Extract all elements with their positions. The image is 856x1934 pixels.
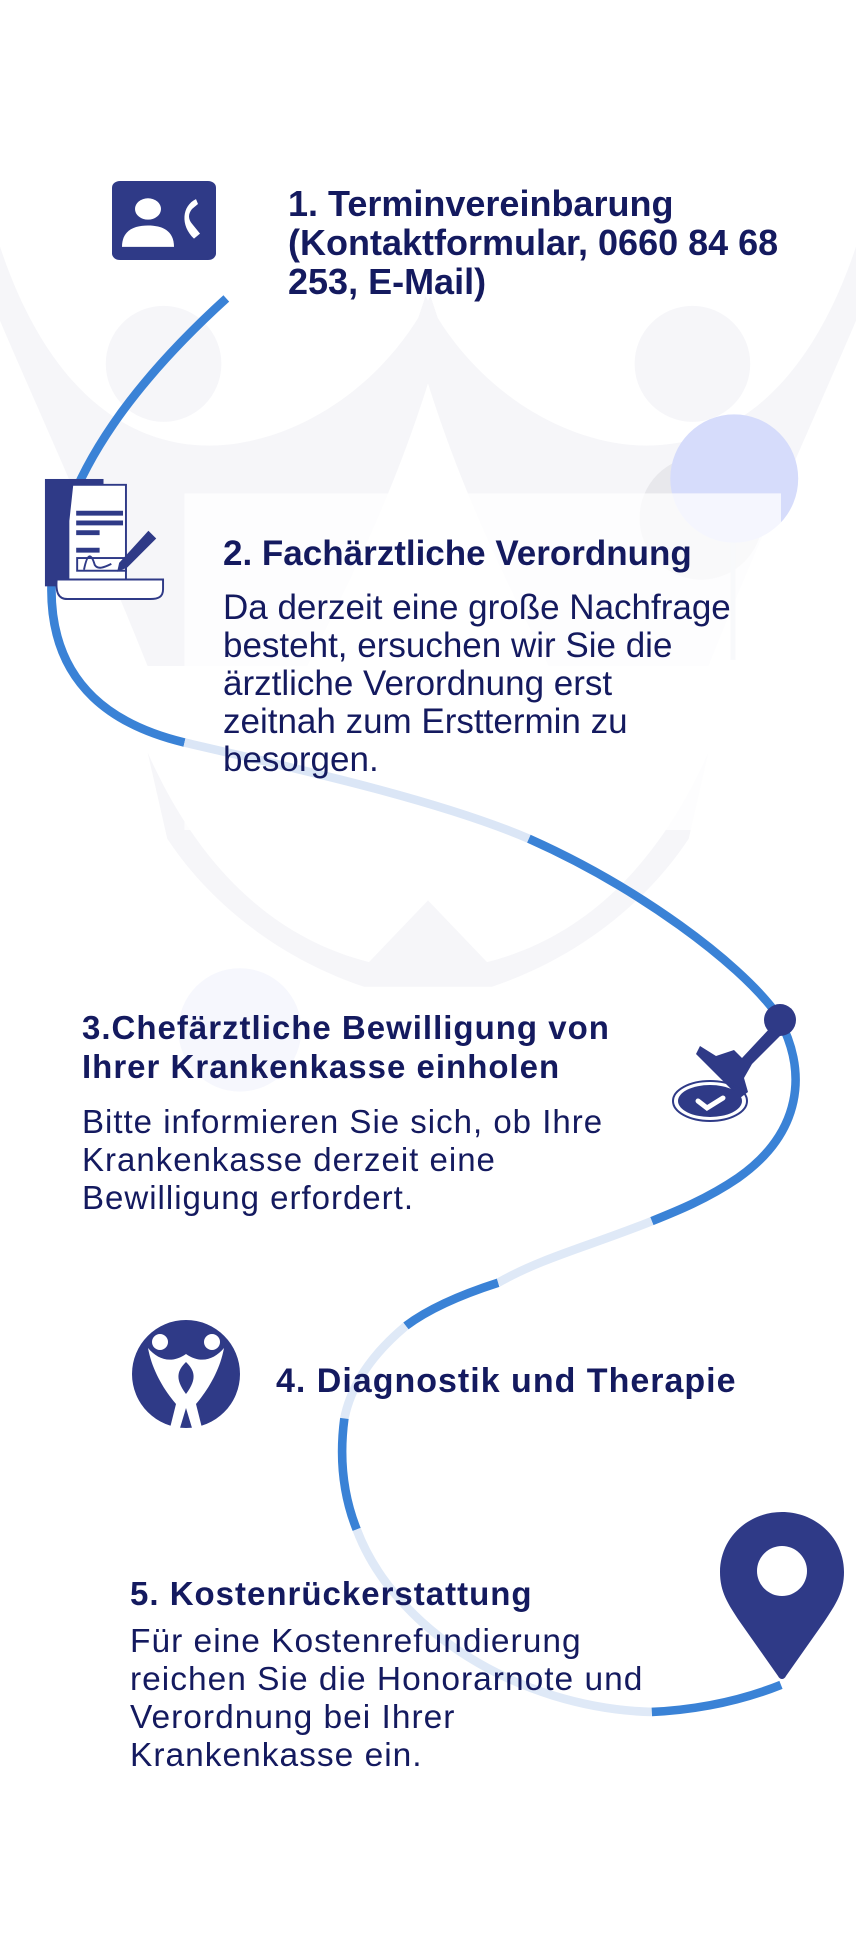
watermark logo xyxy=(0,247,856,987)
icon: logo circle xyxy=(132,1320,240,1428)
heading 1: 1. Terminvereinbarung xyxy=(288,183,673,224)
text 2 xyxy=(223,588,731,779)
icon: contact card xyxy=(112,181,216,260)
heading 1: 253, E-Mail) xyxy=(288,261,486,302)
text 5: Für eine Kostenrefundierung xyxy=(130,1623,582,1660)
route path xyxy=(51,298,796,1712)
icon: stamp xyxy=(672,1004,796,1122)
text 2: besteht, ersuchen wir Sie die xyxy=(223,626,672,665)
white panel xyxy=(184,493,781,830)
text 5: Verordnung bei Ihrer xyxy=(130,1699,455,1736)
text 2: Da derzeit eine große Nachfrage xyxy=(223,588,731,627)
text 3 xyxy=(82,1103,603,1216)
text 5: reichen Sie die Honorarnote und xyxy=(130,1661,643,1698)
icon: location pin xyxy=(720,1512,844,1679)
text 2: besorgen. xyxy=(223,740,379,779)
heading 1 xyxy=(288,183,778,302)
text 3: Bewilligung erfordert. xyxy=(82,1179,414,1216)
text 5 xyxy=(130,1623,643,1774)
heading 5: 5. Kostenrückerstattung xyxy=(130,1575,533,1612)
heading 1: (Kontaktformular, 0660 84 68 xyxy=(288,222,778,263)
text 2: ärztliche Verordnung erst xyxy=(223,664,612,703)
heading 2: 2. Fachärztliche Verordnung xyxy=(223,534,692,573)
decorative circles xyxy=(178,414,798,1092)
text 3: Bitte informieren Sie sich, ob Ihre xyxy=(82,1103,603,1140)
text 3: Krankenkasse derzeit eine xyxy=(82,1141,496,1178)
heading 3 xyxy=(82,1009,610,1085)
icon: prescription document xyxy=(44,478,164,600)
text 5: Krankenkasse ein. xyxy=(130,1737,423,1774)
heading 4: 4. Diagnostik und Therapie xyxy=(276,1362,737,1400)
heading 3: 3.Chefärztliche Bewilligung von xyxy=(82,1009,610,1046)
heading 3: Ihrer Krankenkasse einholen xyxy=(82,1048,560,1085)
text 2: zeitnah zum Ersttermin zu xyxy=(223,702,628,741)
